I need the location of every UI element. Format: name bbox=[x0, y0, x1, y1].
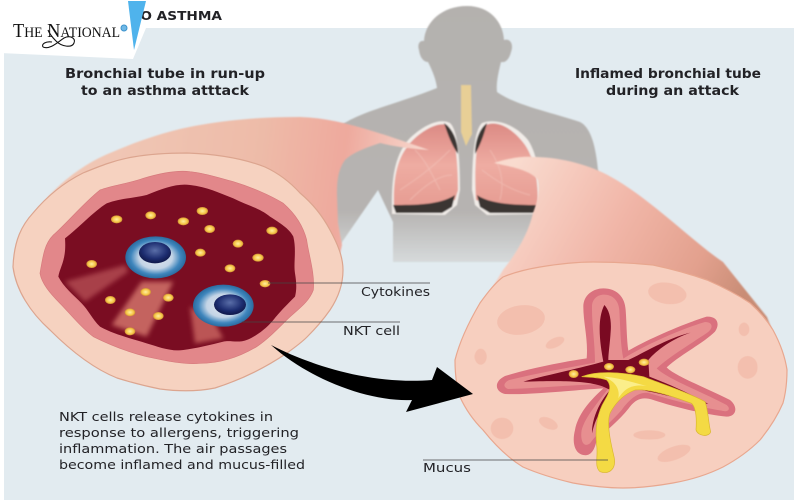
heading: right tube: during an attack bbox=[606, 84, 739, 99]
right bronchial tube bbox=[455, 157, 787, 488]
cytokine dots bbox=[86, 207, 278, 335]
NKT cell upper bbox=[125, 236, 186, 278]
heading: right tube bbox=[575, 67, 761, 99]
right lung bbox=[472, 121, 541, 215]
trachea bbox=[461, 85, 472, 146]
light wedge beside torso bbox=[335, 190, 393, 264]
heading: left tube: Bronchial tube in run-up bbox=[65, 67, 265, 82]
airway lumen bbox=[523, 305, 708, 433]
mucus bbox=[582, 373, 711, 473]
cross section bbox=[475, 280, 758, 473]
tube funnel bbox=[47, 117, 429, 300]
heading: left tube bbox=[65, 67, 265, 99]
explanatory text bbox=[59, 409, 305, 472]
logo wedge bbox=[128, 1, 146, 50]
logo flourish bbox=[43, 30, 74, 48]
wall ring bbox=[40, 171, 314, 364]
heading: right tube: Inflamed bronchial tube bbox=[575, 67, 761, 82]
label: mucus: Mucus bbox=[423, 460, 471, 475]
NKT cell lower bbox=[193, 285, 254, 327]
left lung bbox=[392, 121, 460, 215]
explanatory text: inflammation. The air passages bbox=[59, 441, 287, 456]
tube funnel bbox=[460, 157, 787, 380]
airway dots bbox=[569, 359, 649, 378]
star wall outer bbox=[497, 288, 735, 455]
heading: left tube: to an asthma atttack bbox=[81, 84, 249, 99]
star wall inner bbox=[504, 295, 729, 445]
label: cytokines: Cytokines bbox=[361, 284, 430, 299]
explanatory text: become inflamed and mucus-filled bbox=[59, 457, 305, 472]
logo wordmark: THE NATIONAL bbox=[13, 20, 120, 42]
explanatory text: NKT cells release cytokines in bbox=[59, 409, 273, 424]
curved arrow bbox=[271, 345, 473, 412]
label: NKT cell: NKT cell bbox=[343, 323, 400, 338]
lungs bbox=[392, 121, 541, 215]
human silhouette bbox=[335, 6, 600, 262]
left bronchial tube bbox=[13, 117, 429, 391]
mucus highlight bbox=[603, 377, 647, 398]
outer disc bbox=[13, 153, 343, 391]
cross section bbox=[40, 171, 314, 364]
headline fragment: TO ASTHMA bbox=[131, 9, 223, 23]
tissue blotches bbox=[475, 280, 758, 466]
explanatory text: response to allergens, triggering bbox=[59, 425, 299, 440]
lumen bbox=[58, 185, 296, 350]
logo dot bbox=[121, 25, 127, 31]
outer disc bbox=[455, 262, 787, 488]
leader lines bbox=[242, 283, 608, 460]
logo: The National bbox=[13, 1, 146, 50]
lumen light folds bbox=[65, 265, 223, 343]
